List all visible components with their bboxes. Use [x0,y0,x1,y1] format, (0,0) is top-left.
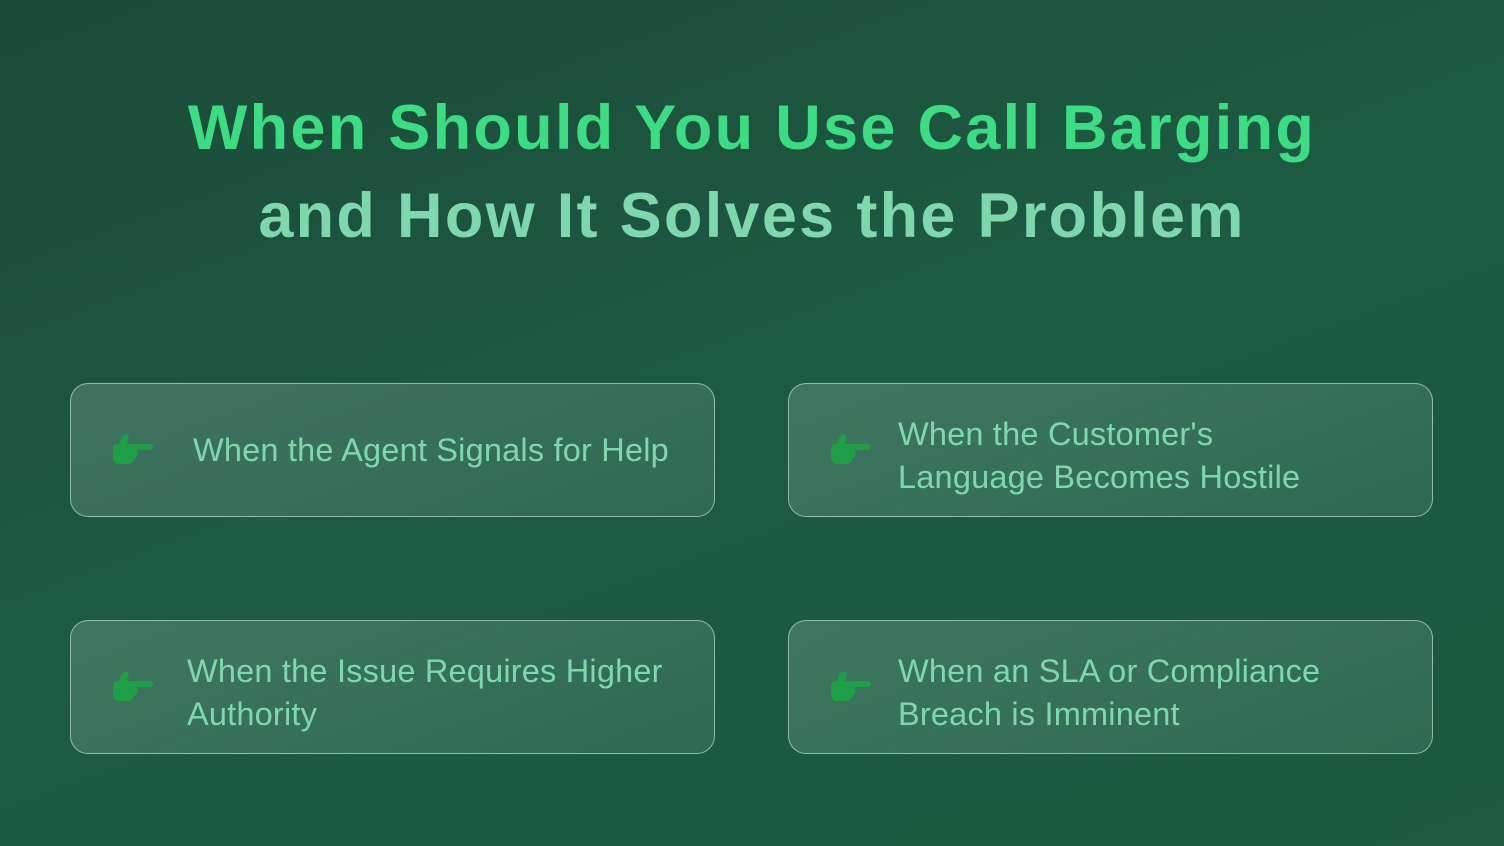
title line 1: When Should You Use Call Barging [188,93,1316,163]
title line 2: and How It Solves the Problem [258,181,1246,251]
text [898,653,1320,732]
text: Breach is Imminent [898,696,1180,732]
text: When an SLA or Compliance [898,653,1320,689]
text [898,416,1300,495]
text: Language Becomes Hostile [898,459,1300,495]
card: agent signals [70,383,715,517]
text: Authority [187,696,317,732]
card: SLA breach [788,620,1433,754]
card: hostile language [788,383,1433,517]
text: When the Agent Signals for Help [193,432,669,468]
icon: pointing hand [831,672,871,701]
icon: pointing hand [113,434,153,464]
card: higher authority [70,620,715,754]
text: When the Issue Requires Higher [187,653,663,689]
text: When the Customer's [898,416,1213,452]
icon: pointing hand [831,434,871,464]
icon: pointing hand [113,672,153,701]
text [187,653,663,732]
